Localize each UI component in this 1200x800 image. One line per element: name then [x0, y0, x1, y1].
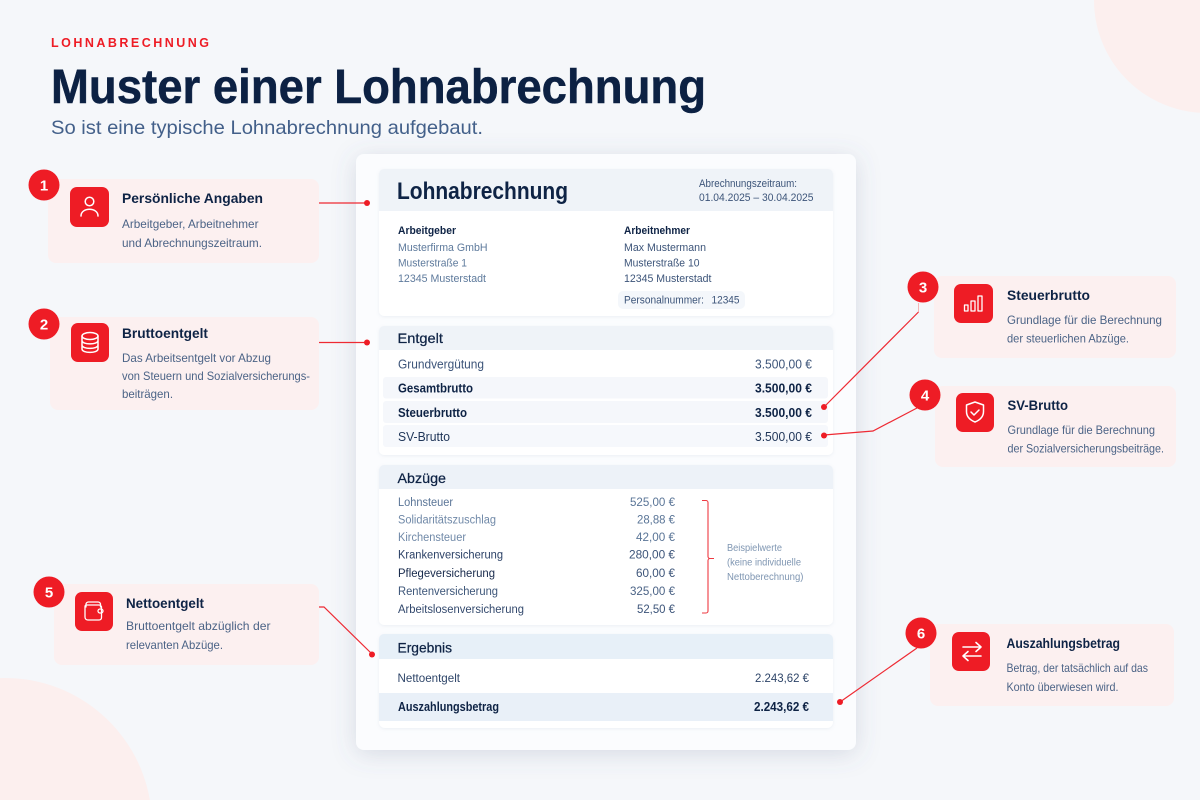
icon: person	[70, 187, 109, 227]
badge 5	[34, 576, 64, 608]
section: Abzüge: Kirchensteuer	[398, 532, 466, 544]
badge 2: 2	[40, 316, 48, 334]
callout 3: Steuerbrutto: der steuerlichen Abzüge.	[1007, 332, 1129, 346]
section: Abzüge: Rentenversicherung	[398, 586, 498, 598]
section: Abzüge: 60,00 €	[636, 568, 676, 580]
badge 6	[906, 618, 936, 648]
section: Abzüge	[379, 465, 833, 625]
callout 5: Nettoentgelt: relevanten Abzüge.	[126, 638, 223, 652]
callout 6: Auszahlungsbetrag: Auszahlungsbetrag	[1006, 635, 1120, 651]
section: header and personal data: Abrechnungszeitraum:	[699, 178, 797, 190]
section: Abzüge: Abzüge	[398, 470, 446, 486]
callout 5: Nettoentgelt: Bruttoentgelt abzüglich der	[126, 619, 270, 633]
section: Abzüge: 28,88 €	[637, 514, 676, 526]
icon: bar chart	[954, 284, 993, 323]
icon: wallet	[75, 592, 113, 631]
section: Abzüge: Solidaritätszuschlag	[398, 514, 496, 526]
section: header and personal data: 12345	[712, 294, 740, 306]
callout 3: Steuerbrutto	[908, 272, 1176, 358]
badge 4	[910, 380, 940, 410]
section: header and personal data	[379, 169, 833, 316]
badge 3: 3	[919, 280, 927, 296]
section: Abzüge: 280,00 €	[629, 550, 676, 562]
section: header and personal data: 01.04.2025 – 30.04.2025	[699, 192, 814, 204]
callout 4: SV-Brutto: SV-Brutto	[1008, 397, 1068, 413]
section: header and personal data: 12345 Musterstadt	[624, 273, 712, 285]
section: header and personal data: Musterfirma GmbH	[398, 242, 488, 254]
callout 1: Persönliche Angaben: Persönliche Angaben	[122, 190, 263, 206]
subtitle: So ist eine typische Lohnabrechnung aufgebaut.	[51, 117, 483, 139]
arrow: connector 5	[319, 607, 375, 658]
decorative corner circle top right	[1094, 0, 1200, 113]
badge 2	[28, 308, 60, 340]
callout 2: Bruttoentgelt	[28, 308, 319, 410]
callout 4: SV-Brutto	[910, 380, 1176, 467]
section: header and personal data: Arbeitnehmer	[624, 225, 691, 237]
callout 3: Steuerbrutto: Grundlage für die Berechnung	[1007, 313, 1162, 327]
section: Ergebnis: 2.243,62 €	[754, 700, 809, 714]
note: example values	[727, 542, 804, 583]
icon: database	[71, 323, 109, 362]
badge 6: 6	[917, 626, 925, 642]
badge 5: 5	[45, 584, 53, 602]
note: example values: Beispielwerte	[727, 542, 782, 554]
eyebrow label: LOHNABRECHNUNG	[51, 36, 209, 50]
section: Entgelt: SV-Brutto	[398, 430, 450, 444]
note: example values: (keine individuelle	[727, 556, 801, 568]
callout 6: Auszahlungsbetrag: Konto überwiesen wird.	[1006, 680, 1118, 694]
badge 1: 1	[40, 178, 48, 194]
callout 3: Steuerbrutto: Steuerbrutto	[1007, 287, 1090, 303]
arrow: connector 1	[319, 200, 370, 206]
badge 3	[908, 272, 938, 302]
section: Ergebnis: Ergebnis	[398, 640, 452, 656]
section: Abzüge: 52,50 €	[637, 604, 676, 616]
section: Abzüge: Lohnsteuer	[398, 497, 453, 509]
callout 4: SV-Brutto: der Sozialversicherungsbeiträge.	[1008, 442, 1164, 456]
section: Abzüge: 42,00 €	[636, 532, 676, 544]
badge 1	[28, 170, 60, 200]
title: Muster einer Lohnabrechnung	[51, 61, 706, 114]
section: Ergebnis: Nettoentgelt	[398, 671, 461, 685]
callout 5: Nettoentgelt: Nettoentgelt	[126, 595, 204, 611]
arrow: connector 2	[319, 340, 370, 346]
section: Ergebnis: 2.243,62 €	[755, 671, 809, 685]
section: header and personal data: Personalnummer:	[624, 294, 704, 306]
section: Entgelt: 3.500,00 €	[755, 430, 812, 444]
section: Entgelt: 3.500,00 €	[755, 358, 812, 372]
arrow: connector 6	[837, 648, 917, 705]
badge 4: 4	[921, 388, 930, 404]
callout 6: Auszahlungsbetrag: Betrag, der tatsächlich auf das	[1006, 661, 1148, 675]
callout 2: Bruttoentgelt: Bruttoentgelt	[122, 325, 208, 341]
callout 2: Bruttoentgelt: von Steuern und Sozialversicherungs-	[122, 369, 310, 383]
section: Entgelt: Steuerbrutto	[398, 406, 467, 420]
callout 1: Persönliche Angaben	[28, 170, 319, 263]
section: Entgelt: Entgelt	[398, 330, 443, 346]
section: header and personal data: Lohnabrechnung	[397, 178, 568, 205]
callout 1: Persönliche Angaben: Arbeitgeber, Arbeitnehmer	[122, 217, 258, 231]
section: Abzüge: Arbeitslosenversicherung	[398, 604, 524, 616]
section: Abzüge: 325,00 €	[630, 586, 676, 598]
callout 2: Bruttoentgelt: Das Arbeitsentgelt vor Abzug	[122, 351, 271, 365]
callout 4: SV-Brutto: Grundlage für die Berechnung	[1008, 423, 1155, 437]
icon: shield	[956, 393, 994, 432]
section: Entgelt: Gesamtbrutto	[398, 382, 473, 396]
arrow: connector 3	[821, 303, 918, 410]
section: Entgelt: Grundvergütung	[398, 358, 484, 372]
callout 1: Persönliche Angaben: und Abrechnungszeitraum.	[122, 236, 262, 250]
section: Abzüge: 525,00 €	[630, 497, 676, 509]
section: header and personal data: Musterstraße 1	[398, 258, 467, 270]
callout 6: Auszahlungsbetrag	[906, 618, 1174, 706]
decorative corner circle bottom left	[0, 678, 150, 800]
arrow: connector 4	[821, 408, 917, 438]
bracket	[702, 500, 714, 613]
icon: transfer arrows	[952, 632, 990, 671]
callout 2: Bruttoentgelt: beiträgen.	[122, 387, 173, 401]
section: header and personal data: 12345 Musterstadt	[398, 273, 486, 285]
panel: payslip document	[356, 154, 856, 750]
section: Abzüge: Pflegeversicherung	[398, 568, 495, 580]
section: header and personal data: Max Mustermann	[624, 242, 706, 254]
section: Entgelt: 3.500,00 €	[755, 406, 812, 420]
callout 5: Nettoentgelt	[34, 576, 319, 665]
note: example values: Nettoberechnung)	[727, 571, 804, 583]
section: Entgelt	[379, 326, 833, 455]
section: Abzüge: Krankenversicherung	[398, 550, 503, 562]
section: header and personal data: Musterstraße 10	[624, 258, 700, 270]
section: Ergebnis	[379, 634, 833, 728]
section: Entgelt: 3.500,00 €	[755, 382, 812, 396]
section: Ergebnis: Auszahlungsbetrag	[398, 700, 499, 714]
section: header and personal data: Arbeitgeber	[398, 225, 457, 237]
